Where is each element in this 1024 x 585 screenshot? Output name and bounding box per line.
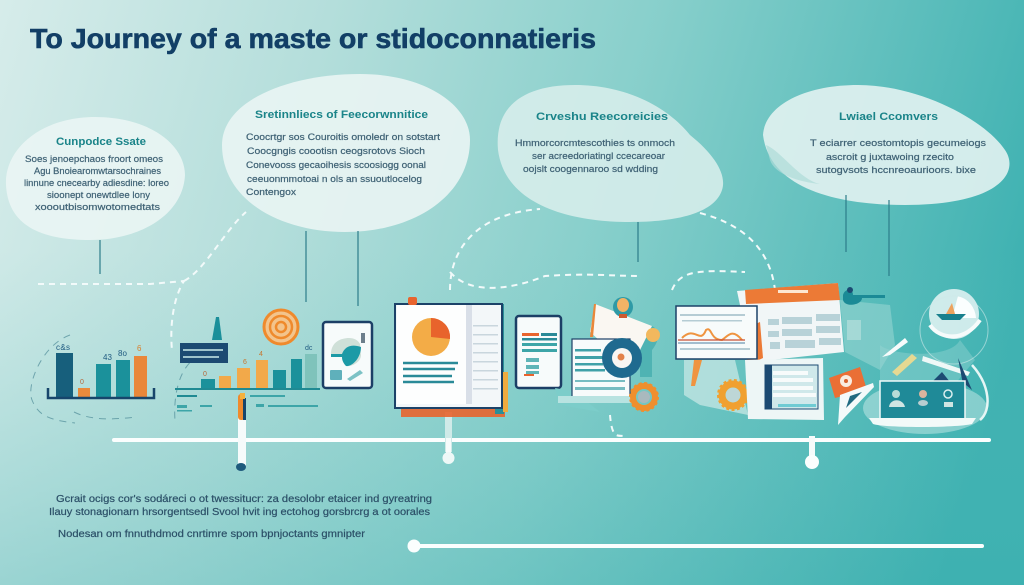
footer text block: Gcrait ocigs cor's sodáreci o ot twessitucr: za desolobr etaicer ind gyreatring <box>56 494 432 505</box>
bubble 3 heading: Crveshu Reecoreicies <box>536 111 668 123</box>
icon: orange tag and triangle <box>829 367 874 425</box>
bubble 2 body text: Conevooss gecaoihesis scoosiogg oonal <box>246 160 426 170</box>
bubble 2 body text: Coocgngis coootisn ceogsrotovs Sioch <box>247 146 425 156</box>
panel: speech bubble 4 <box>763 85 1009 205</box>
bar chart 2: 4 <box>259 351 263 358</box>
bubble 3 body text <box>515 138 675 174</box>
bar chart 1: 8o <box>118 349 127 358</box>
bar chart 2: dc <box>305 345 313 352</box>
footer text block: Ilauy stonagionarn hrsorgentsedl Svool hvit ing ectohog gorsbrcrg a ot oorales <box>49 507 430 518</box>
icon: orange gear <box>630 383 658 411</box>
bar chart 1: 6 <box>137 344 142 353</box>
bar chart 2 <box>175 317 320 412</box>
timeline bar bottom <box>408 540 984 552</box>
dashed paths <box>38 209 775 436</box>
bubble 3 body text: oojslt coogennaroo sd wdding <box>523 164 658 174</box>
bar chart 2: 0 <box>203 371 207 378</box>
icon: person and flag <box>590 297 660 377</box>
timeline marker 3 <box>805 436 819 469</box>
timeline bar top <box>112 438 991 442</box>
bubble 1 heading: Cunpodce Ssate <box>56 136 146 148</box>
document cluster: lower-left sheet and gear <box>684 360 748 415</box>
bubble 4 body text <box>810 138 987 175</box>
bubble 4 heading: Lwiael Ccomvers <box>839 111 938 123</box>
bubble 2 body text <box>246 132 441 197</box>
icon: open book report <box>395 297 508 417</box>
connector lines <box>100 195 889 306</box>
timeline marker 2 <box>442 412 454 464</box>
title: To Journey of a maste or stidoconnatieris <box>30 23 596 54</box>
bubble 1 body text: xoooutbisomwotomedtats <box>35 202 161 212</box>
bubble 4 body text: ascroit g juxtawoing rzecito <box>826 152 954 162</box>
icon: laptop with people <box>863 358 988 434</box>
icon: tablet with pie <box>323 322 372 388</box>
panel: speech bubble 2 <box>222 74 470 232</box>
bar chart 1: 43 <box>103 353 112 362</box>
bar chart 1: c&s <box>56 343 70 352</box>
icon: line chart window <box>676 306 757 359</box>
document cluster: blue form <box>745 358 824 420</box>
document cluster: orange header sheet <box>737 283 844 365</box>
icon: laptop with badge <box>555 338 642 412</box>
icon: globe with ship <box>920 289 988 364</box>
bar chart 1 <box>48 343 154 398</box>
bubble 1 body text: Soes jenoepchaos froort omeos <box>25 154 164 164</box>
panel: speech bubble 1 <box>6 117 185 240</box>
bubble 2 body text: ceeuonmmotoai n ols an ssuoutlocelog <box>247 174 422 184</box>
decorative thin dashes <box>31 335 200 423</box>
bubble 1 body text: sioonept onewtdlee lony <box>47 190 151 200</box>
bubble 1 body text <box>24 154 169 212</box>
bubble 1 body text: Agu Bnoiearomwtarsochraines <box>34 166 162 176</box>
panel: speech bubble 3 <box>498 85 723 222</box>
icon: upper cluster props <box>840 287 975 390</box>
bubble 4 body text: sutogvsots hccnreoaurioors. bixe <box>816 165 976 175</box>
icon: orange target <box>264 310 298 344</box>
icon: small tablet <box>516 316 561 388</box>
bar chart 1: 0 <box>80 379 84 386</box>
timeline marker 1 <box>236 393 246 471</box>
bubble 2 body text: Coocrtgr sos Couroitis omoledr on sotstart <box>246 132 441 142</box>
footer text block <box>49 494 432 540</box>
bubble 3 body text: ser acreedoriatingl ccecareoar <box>532 151 665 161</box>
bar chart 2: 6 <box>243 359 247 366</box>
bubble 2 heading: Sretinnliecs of Feecorwnnitice <box>255 109 428 121</box>
bubble 3 body text: Hmmorcorcmtescothies ts onmoch <box>515 138 675 148</box>
bubble 2 body text: Contengox <box>246 187 297 197</box>
footer text block: Nodesan om fnnuthdmod cnrtimre spom bpnjoctants gmnipter <box>58 529 366 540</box>
bubble 4 body text: T eciarrer ceostomtopis gecumeiogs <box>810 138 987 148</box>
bubble 1 body text: linnune cnecearby adiesdine: loreo <box>24 178 169 188</box>
